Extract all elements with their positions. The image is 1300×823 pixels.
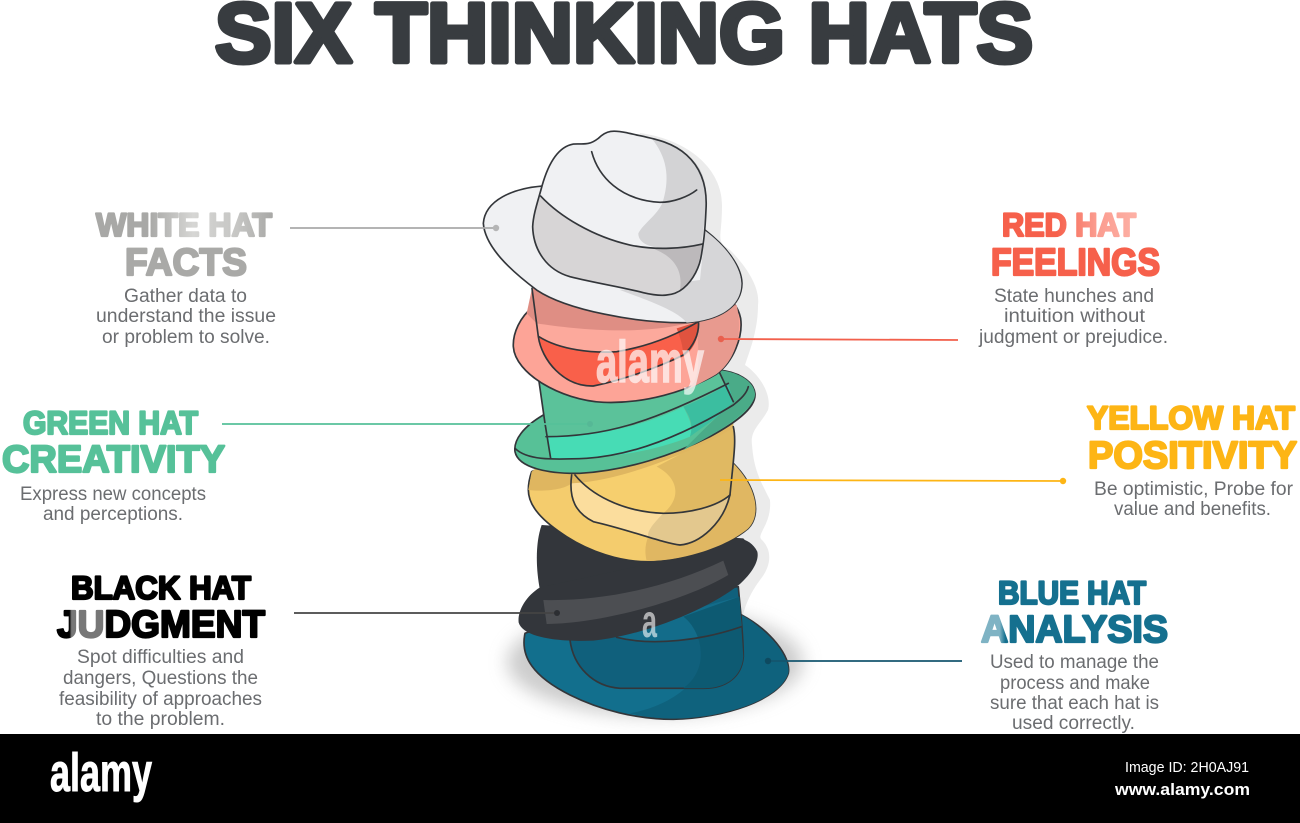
label: yellow hat: value and benefits. — [1114, 499, 1271, 520]
label: black hat: feasibility of approaches — [59, 689, 262, 710]
label: red hat: judgment or prejudice. — [978, 327, 1168, 348]
label: red hat: FEELINGS — [991, 242, 1160, 284]
green hat — [515, 370, 755, 473]
watermark — [596, 330, 704, 647]
footer bar: Image ID: 2H0AJ91 — [1125, 759, 1249, 776]
label: black hat: to the problem. — [96, 709, 225, 730]
label: black hat: JUDGMENT — [57, 604, 265, 646]
label: yellow hat: POSITIVITY — [1088, 435, 1297, 477]
label: red hat: State hunches and — [994, 286, 1154, 307]
footer bar — [0, 734, 1300, 823]
label: yellow hat — [1087, 400, 1297, 520]
label: white hat: Gather data to — [124, 286, 247, 307]
leader line: black hat — [294, 610, 560, 616]
label: green hat: CREATIVITY — [2, 439, 225, 481]
watermark: alamy — [596, 330, 704, 395]
yellow hat — [528, 420, 756, 562]
footer bar: alamy — [50, 743, 152, 803]
blue hat — [524, 587, 789, 719]
label: black hat: BLACK HAT — [71, 570, 251, 606]
label: white hat: or problem to solve. — [102, 327, 270, 348]
black hat — [519, 525, 758, 641]
leader line: yellow hat — [720, 478, 1066, 484]
label: blue hat: BLUE HAT — [998, 575, 1146, 611]
label: black hat — [57, 570, 265, 730]
label: green hat: and perceptions. — [43, 504, 183, 525]
label: black hat: dangers, Questions the — [63, 668, 258, 689]
leader line: white hat — [290, 225, 499, 231]
hat stack drop shadow — [507, 133, 803, 716]
label: blue hat: process and make — [1000, 673, 1150, 694]
label: blue hat: used correctly. — [1012, 713, 1135, 734]
white hat — [483, 131, 742, 323]
red hat — [513, 277, 741, 402]
leader line: blue hat — [765, 658, 962, 664]
label: red hat — [978, 207, 1168, 348]
label: black hat: Spot difficulties and — [77, 647, 244, 668]
label: yellow hat: Be optimistic, Probe for — [1094, 479, 1294, 500]
leader line: red hat — [718, 336, 958, 342]
label: blue hat: sure that each hat is — [990, 693, 1159, 714]
label: yellow hat: YELLOW HAT — [1087, 400, 1295, 436]
label: blue hat: ANALYSIS — [981, 609, 1168, 651]
label: blue hat: Used to manage the — [990, 652, 1159, 673]
footer bar: www.alamy.com — [1114, 780, 1250, 799]
label: white hat: WHITE HAT — [96, 207, 272, 243]
label: red hat: RED HAT — [1002, 207, 1136, 243]
label: blue hat — [981, 575, 1168, 734]
label: white hat: FACTS — [125, 242, 247, 284]
label: white hat: understand the issue — [96, 306, 276, 327]
label: red hat: intuition without — [1004, 306, 1146, 327]
label: white hat — [96, 207, 276, 348]
label: green hat: Express new concepts — [20, 484, 206, 505]
label: green hat: GREEN HAT — [23, 405, 198, 441]
watermark: a — [642, 595, 657, 647]
label: green hat — [2, 405, 225, 525]
leader line: green hat — [222, 421, 593, 427]
hat stack illustration — [483, 131, 789, 719]
